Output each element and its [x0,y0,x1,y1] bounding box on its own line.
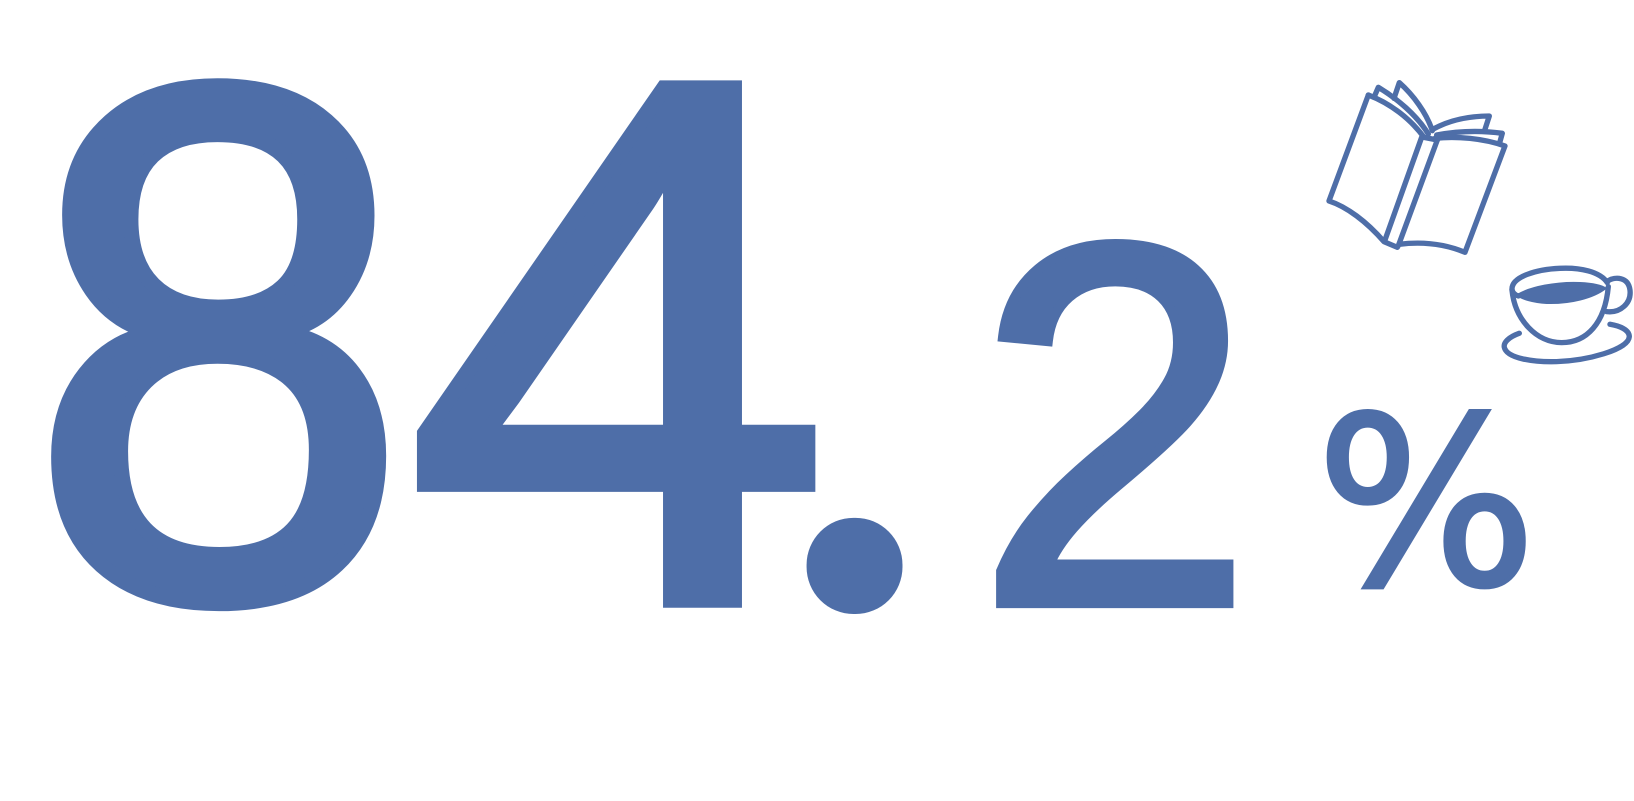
percent sign: % [1316,368,1536,639]
decimal digit 2: 2 [976,138,1254,713]
icon: open book [1329,83,1505,252]
decimal point: . [852,550,857,572]
icon: coffee cup on saucer [1504,268,1630,362]
